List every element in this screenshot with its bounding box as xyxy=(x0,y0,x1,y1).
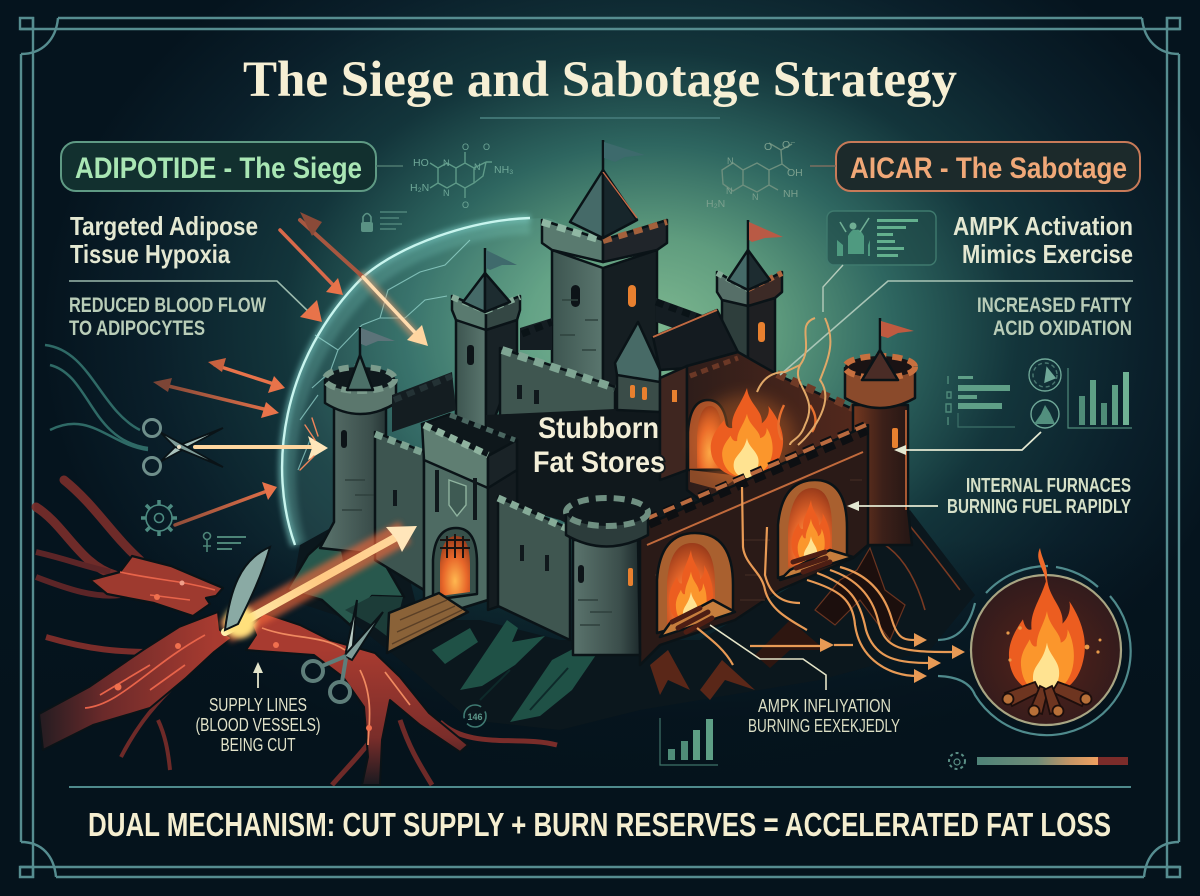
text: targeted adipose xyxy=(70,211,258,269)
title: The Siege and Sabotage Strategy xyxy=(243,52,957,108)
text: AMPK activation: AMPK Activation xyxy=(953,211,1133,241)
castle: centre wall and dark courtyard xyxy=(486,348,700,560)
arrows: incoming siege arrows xyxy=(153,212,428,525)
castle: main keep xyxy=(542,140,667,410)
icon: left molecule: O xyxy=(483,142,490,152)
castle: chapel and dark roof xyxy=(615,310,865,500)
icon: right molecule: O xyxy=(764,141,772,153)
text: reduced blood flow xyxy=(69,294,266,340)
text: targeted adipose: Tissue Hypoxia xyxy=(70,239,230,269)
icon: severed teal strands xyxy=(45,345,148,450)
callout line: AMPK inflation xyxy=(710,625,826,690)
arrow: mid arrow two xyxy=(153,378,279,418)
text: AMPK activation xyxy=(953,211,1133,269)
icon: scissors right xyxy=(303,600,383,702)
callout line: reduced blood flow xyxy=(69,281,322,322)
text: supply lines: BEING CUT xyxy=(220,734,296,755)
icon: left molecule: O xyxy=(462,200,469,210)
panel: AICAR heading pill: AICAR - The Sabotage xyxy=(850,152,1127,185)
arrow: mid arrow one xyxy=(208,358,285,393)
arrow: supply lines callout xyxy=(253,662,263,688)
icon: scissors blade at cut xyxy=(225,547,270,630)
icon: left molecule: N xyxy=(443,188,450,198)
icon: timer badge xyxy=(464,705,486,727)
castle: mountains xyxy=(287,510,975,730)
panel: Adipotide heading pill xyxy=(61,142,403,191)
icon: right molecule: H₂N xyxy=(706,198,725,210)
text: internal furnaces xyxy=(947,475,1131,518)
icon: campfire circle xyxy=(938,548,1131,735)
icon: lock and lines xyxy=(361,212,407,232)
text: internal furnaces: INTERNAL FURNACES xyxy=(966,475,1131,497)
icon: scissors left xyxy=(144,420,223,474)
vessel: centre right severed xyxy=(246,613,557,785)
castle: right round tower xyxy=(845,318,915,545)
icon: right molecule: N xyxy=(727,156,734,166)
text: increased fatty acid oxidation xyxy=(977,294,1132,340)
text: supply lines: (BLOOD VESSELS) xyxy=(196,714,320,735)
icon: small data list xyxy=(946,376,1015,427)
icon: exercise panel xyxy=(823,211,936,312)
icon: right molecule xyxy=(706,139,803,210)
text: castle label: Fat Stores xyxy=(533,446,665,479)
icon: gear xyxy=(141,500,177,536)
castle: front brown wall with furnaces xyxy=(640,425,868,665)
castle xyxy=(287,140,975,730)
callout arrows: furnace xyxy=(847,432,1041,511)
castle: burning upper furnace xyxy=(688,388,816,490)
castle: low front wall xyxy=(498,497,570,640)
text: internal furnaces: BURNING FUEL RAPIDLY xyxy=(947,496,1131,518)
flow arrows to campfire xyxy=(697,487,965,683)
text: castle label: Stubborn xyxy=(538,412,659,445)
icon: left molecule: O xyxy=(462,142,469,152)
castle: back battlements xyxy=(520,298,722,350)
panel: Adipotide heading pill: ADIPOTIDE - The Siege xyxy=(75,152,362,185)
icon: right molecule: NH xyxy=(783,188,798,200)
icon: right molecule: N xyxy=(726,186,732,196)
castle: right square tower xyxy=(717,220,783,420)
icon: two small gauges xyxy=(1029,359,1061,428)
vessel: lower left severed xyxy=(39,612,232,770)
text: increased fatty acid oxidation: ACID OXIDATION xyxy=(993,317,1132,340)
castle: wooden bridge xyxy=(387,593,468,653)
bar chart: right mini chart xyxy=(1068,368,1132,428)
icon: left molecule: N xyxy=(443,158,450,168)
text: supply lines: SUPPLY LINES xyxy=(209,694,307,715)
castle: front round tower xyxy=(566,498,648,655)
text: reduced blood flow: TO ADIPOCYTES xyxy=(69,317,205,340)
text: targeted adipose: Targeted Adipose xyxy=(70,211,258,241)
arrow: lower arrow xyxy=(175,482,277,525)
flame xyxy=(1009,548,1085,694)
icon: right molecule: N xyxy=(752,192,758,202)
arrow: glowing scissors arrow xyxy=(195,418,328,470)
icon: small legend lines xyxy=(203,532,246,552)
callout line: AMPK xyxy=(780,281,1133,375)
text: reduced blood flow: REDUCED BLOOD FLOW xyxy=(69,294,266,317)
icon: left molecule xyxy=(410,142,513,210)
castle: left curtain wall xyxy=(375,372,456,590)
icon: left molecule: H₂N xyxy=(410,182,429,194)
text: castle label xyxy=(533,412,665,479)
vessel: upper severed xyxy=(36,480,223,616)
icon: timer badge: 146 xyxy=(467,712,483,722)
blood vessels xyxy=(36,480,557,785)
text: AMPK inflation xyxy=(748,695,900,736)
arrow: upper short arrow xyxy=(280,230,343,295)
icon: right molecule: O⁻ xyxy=(782,139,796,151)
icon: left molecule: NH₃ xyxy=(494,164,513,176)
text: supply lines xyxy=(196,694,320,755)
progress bar xyxy=(977,757,1128,765)
arrow: long glowing arrow xyxy=(300,212,428,346)
logs xyxy=(1002,682,1092,716)
lower furnace xyxy=(657,533,735,637)
icon: small gear dots xyxy=(949,753,965,769)
text: increased fatty acid oxidation: INCREASED FATTY xyxy=(977,294,1132,317)
icon: left molecule: N xyxy=(474,162,480,172)
smoke wisps xyxy=(757,318,830,445)
text: AMPK inflation: AMPK INFLIYATION xyxy=(758,695,891,716)
panel: AICAR heading pill xyxy=(810,142,1140,191)
castle: left round tower xyxy=(320,327,396,556)
castle: gatehouse xyxy=(422,414,517,620)
icon: left molecule: HO xyxy=(413,157,429,169)
text: AMPK inflation: BURNING EEXEKJEDLY xyxy=(748,715,900,736)
arrow: main laser cutting ray xyxy=(224,526,417,638)
castle: left square tower xyxy=(452,248,520,440)
bar chart: lower mini chart xyxy=(660,718,718,765)
divider above conclusion xyxy=(69,786,1131,788)
text: AMPK activation: Mimics Exercise xyxy=(962,239,1133,269)
force field shield xyxy=(282,218,585,545)
icon: right molecule: OH xyxy=(787,167,803,179)
upper right furnace xyxy=(778,480,853,580)
